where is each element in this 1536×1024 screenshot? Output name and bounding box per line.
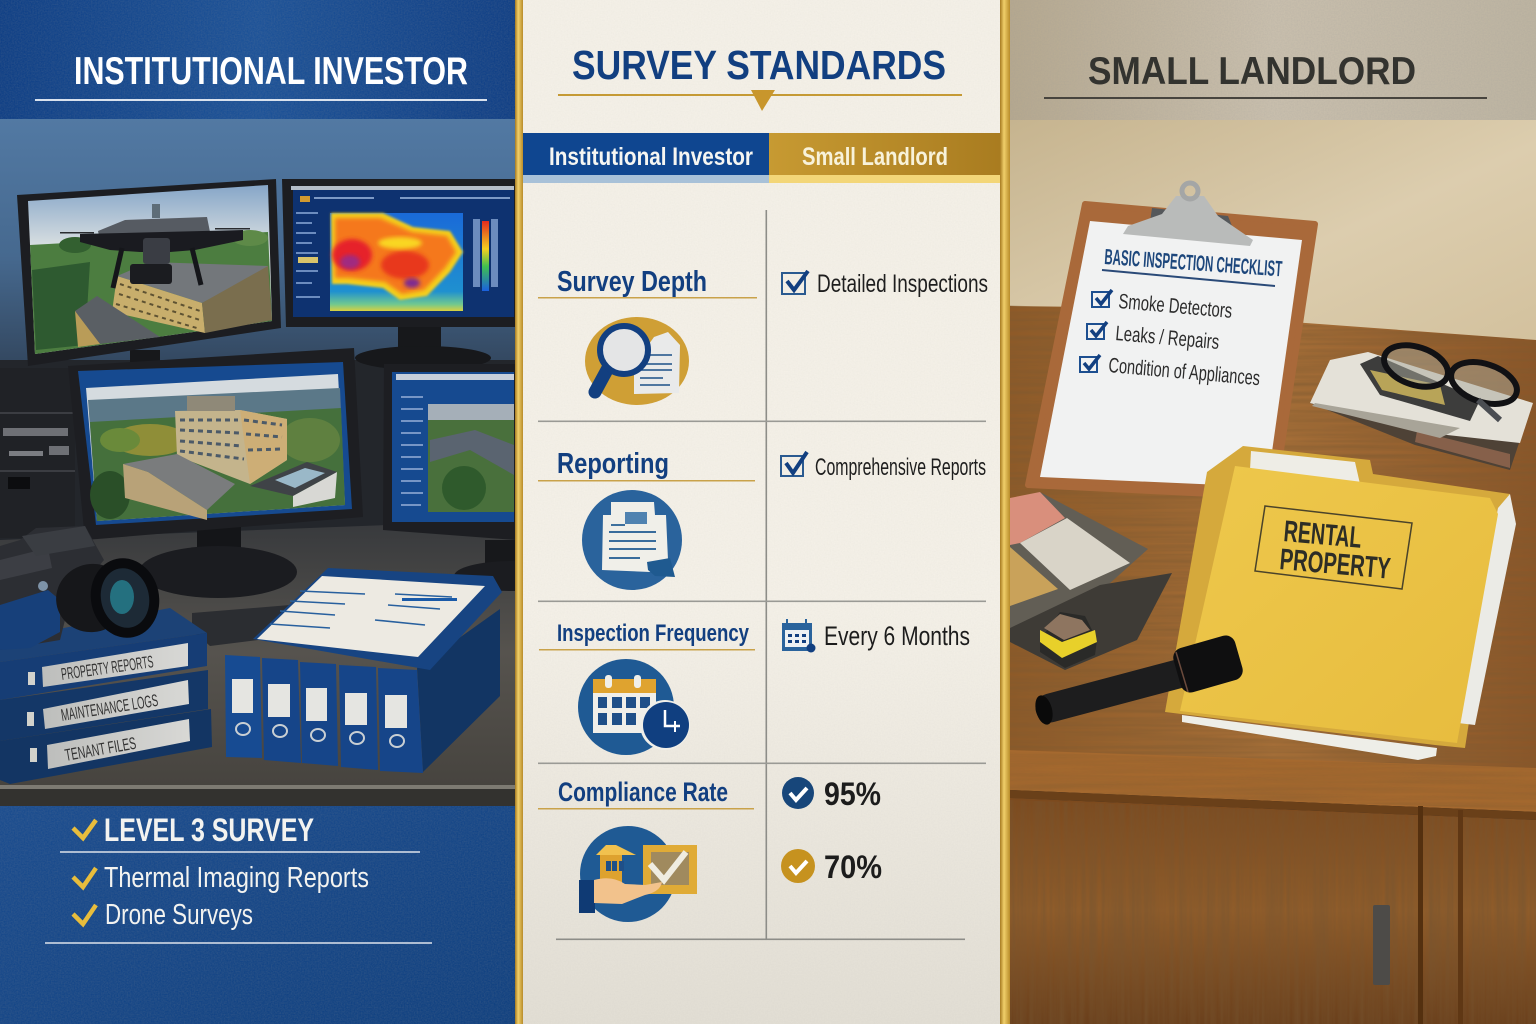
clipboard with basic inspection checklist — [1028, 183, 1315, 497]
label: inspection frequency: Inspection Frequency — [557, 620, 749, 647]
monitor: thermal heat map — [282, 179, 516, 370]
stack of labelled binders — [0, 608, 212, 784]
text: comprehensive reports: Comprehensive Reports — [815, 454, 986, 481]
icon: magnifier and document — [585, 317, 689, 405]
check: level 3 survey — [73, 820, 96, 838]
value: 70%: 70% — [824, 849, 882, 885]
text: thermal imaging reports: Thermal Imaging Reports — [104, 862, 369, 894]
key deliverables list — [0, 806, 516, 1024]
panel: institutional investor — [0, 0, 570, 1024]
icon: glasses — [1379, 338, 1522, 420]
heading: survey standards: SURVEY STANDARDS — [572, 42, 946, 88]
desk surface — [0, 520, 516, 785]
label: survey depth: Survey Depth — [557, 266, 707, 298]
check: drone surveys — [73, 905, 96, 924]
header band: small landlord — [1010, 0, 1536, 120]
label: compliance rate: Compliance Rate — [558, 777, 728, 807]
monitor: building aerial view — [68, 348, 363, 598]
monitor: drone aerial view — [17, 179, 281, 368]
cabinet handle — [1373, 905, 1390, 985]
computer tower — [0, 368, 75, 538]
heading: institutional investor: INSTITUTIONAL INVESTOR — [74, 50, 468, 93]
row: compliance rate — [538, 776, 882, 922]
icon: blue check badge — [782, 777, 814, 809]
keyboard — [192, 605, 290, 646]
table grid — [538, 210, 986, 940]
check: smoke detectors — [1092, 290, 1112, 307]
text: property: PROPERTY — [1278, 543, 1392, 586]
row: inspection frequency — [539, 619, 970, 755]
text: level 3 survey: LEVEL 3 SURVEY — [104, 812, 314, 848]
check: thermal imaging — [73, 868, 96, 887]
icon: house in hand with approval — [579, 826, 697, 922]
icon: camera — [0, 526, 167, 650]
label: tenant files: TENANT FILES — [63, 734, 138, 765]
text: rental: RENTAL — [1282, 515, 1363, 555]
monitor: site management dashboard — [383, 364, 570, 591]
header: institutional investor: Institutional Investor — [549, 143, 753, 171]
row: reporting — [538, 448, 986, 590]
label: reporting: Reporting — [557, 448, 669, 480]
icon: small calendar — [782, 619, 816, 652]
metal clip — [1123, 183, 1253, 246]
icon: report document — [582, 490, 682, 590]
panel: small landlord — [1010, 0, 1536, 1024]
table header — [523, 133, 1000, 183]
label: property reports: PROPERTY REPORTS — [60, 652, 155, 684]
header band: institutional investor — [0, 0, 516, 119]
left paperwork pile — [1010, 492, 1172, 670]
item: leaks repairs: Leaks / Repairs — [1115, 322, 1220, 354]
item: smoke detectors: Smoke Detectors — [1118, 290, 1233, 323]
header: small landlord: Small Landlord — [802, 143, 948, 171]
check: appliances — [1080, 355, 1100, 372]
value: 95%: 95% — [824, 776, 881, 812]
wooden desk — [1010, 300, 1536, 820]
cabinet front with door — [1010, 798, 1536, 1024]
icon: flashlight — [1032, 633, 1245, 727]
label: maintenance logs: MAINTENANCE LOGS — [60, 691, 159, 725]
photo: surveying desk with monitors — [0, 119, 570, 806]
checklist title: BASIC INSPECTION CHECKLIST — [1104, 244, 1283, 281]
text: detailed inspections: Detailed Inspections — [817, 270, 988, 298]
papers with glasses — [1310, 338, 1533, 470]
icon: check box — [781, 452, 807, 476]
check: leaks repairs — [1087, 322, 1107, 339]
icon: calendar and clock — [578, 659, 690, 755]
icon: gold check badge — [781, 849, 815, 883]
folder label box — [1255, 506, 1412, 589]
item: condition of appliances: Condition of Appliances — [1108, 354, 1261, 390]
panel: survey standards — [515, 0, 1010, 1024]
icon: gold down arrow — [751, 90, 775, 111]
icon: drone — [60, 228, 250, 288]
heading: small landlord: SMALL LANDLORD — [1088, 50, 1416, 93]
binders with documents — [225, 568, 502, 773]
icon: tape measure — [1040, 612, 1097, 668]
row: survey depth — [538, 266, 988, 405]
chart: heat map — [330, 213, 463, 311]
text: every 6 months: Every 6 Months — [824, 621, 970, 651]
text: drone surveys: Drone Surveys — [105, 899, 253, 931]
wall — [1010, 120, 1536, 360]
folder: rental property — [1165, 446, 1516, 760]
icon: check box — [782, 271, 808, 294]
